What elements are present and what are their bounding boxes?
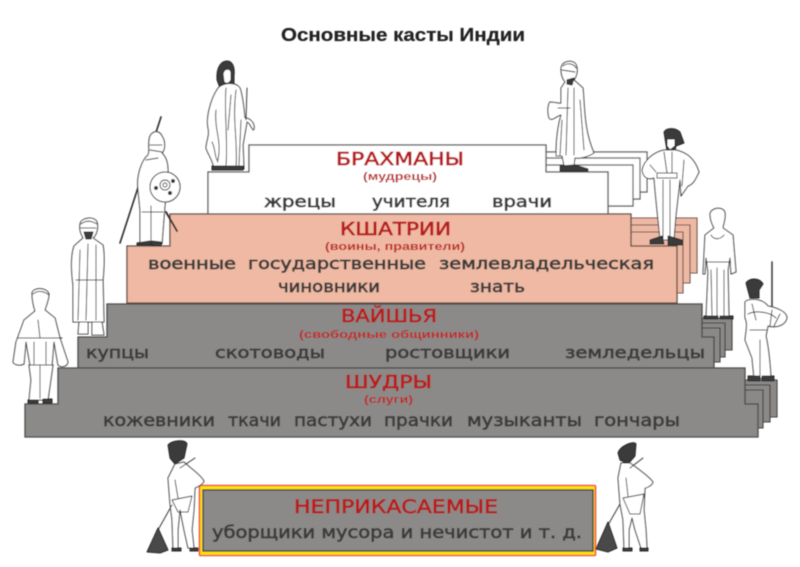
tier: Shudras: (слуги) <box>364 394 413 406</box>
tier: Untouchables: уборщики мусора и нечистот и т. д. <box>212 523 582 543</box>
tier: Brahmins: (мудрецы) <box>363 171 437 183</box>
figure: merchant with cloth <box>13 289 68 403</box>
tier: Brahmins <box>208 145 647 214</box>
figure: soldier on the right <box>745 262 787 381</box>
tier: Shudras: ШУДРЫ <box>345 372 432 393</box>
figure: Kshatriya warrior <box>120 117 180 246</box>
tier: Vaishyas: купцы <box>86 343 149 362</box>
tier: Brahmins: БРАХМАНЫ <box>336 149 464 170</box>
tier: Kshatriyas: чиновники <box>278 277 380 296</box>
tier: Shudras: гончары <box>594 411 680 431</box>
tier: Brahmins: врачи <box>492 192 552 211</box>
tier: Shudras <box>25 368 777 437</box>
tier: Shudras: кожевники <box>103 411 215 431</box>
figure: Kshatriya ruler <box>642 129 699 245</box>
tier: Kshatriyas: государственные <box>248 254 426 273</box>
tier: Untouchables <box>200 486 596 556</box>
title: Основные касты Индии <box>281 25 525 45</box>
tier: Kshatriyas <box>127 214 697 303</box>
tier: Brahmins: жрецы <box>264 192 336 211</box>
tier: Brahmins: учителя <box>372 192 450 211</box>
tier: Untouchables: НЕПРИКАСАЕМЫЕ <box>294 496 498 518</box>
tier: Kshatriyas: (воины, правители) <box>325 241 465 253</box>
tier: Vaishyas: (свободные общинники) <box>299 329 479 341</box>
tier: Vaishyas: ВАЙШЬЯ <box>341 305 437 327</box>
tier: Shudras: ткачи <box>228 411 281 431</box>
tier: Kshatriyas: КШАТРИИ <box>340 219 451 240</box>
tier: Vaishyas: земледельцы <box>565 343 705 362</box>
tier: Vaishyas <box>78 304 732 368</box>
tier: Kshatriyas: знать <box>470 277 525 296</box>
figure: Vaishya in robe <box>72 218 104 335</box>
tier: Shudras: прачки <box>384 411 453 431</box>
tier: Shudras: пастухи <box>294 411 372 431</box>
tier: Kshatriyas: землевладельческая <box>439 254 654 273</box>
figure: left sweeper <box>147 441 204 553</box>
tier: Shudras: музыканты <box>467 411 582 431</box>
tier: Vaishyas: ростовщики <box>385 343 510 362</box>
figure: right sweeper <box>596 443 653 552</box>
figure: Brahmin teacher <box>548 61 594 171</box>
tier: Vaishyas: скотоводы <box>215 343 325 362</box>
figure: bare-chested Vaishya <box>703 208 736 319</box>
figure: Brahmin sage <box>206 61 254 170</box>
tier: Kshatriyas: военные <box>148 254 236 273</box>
